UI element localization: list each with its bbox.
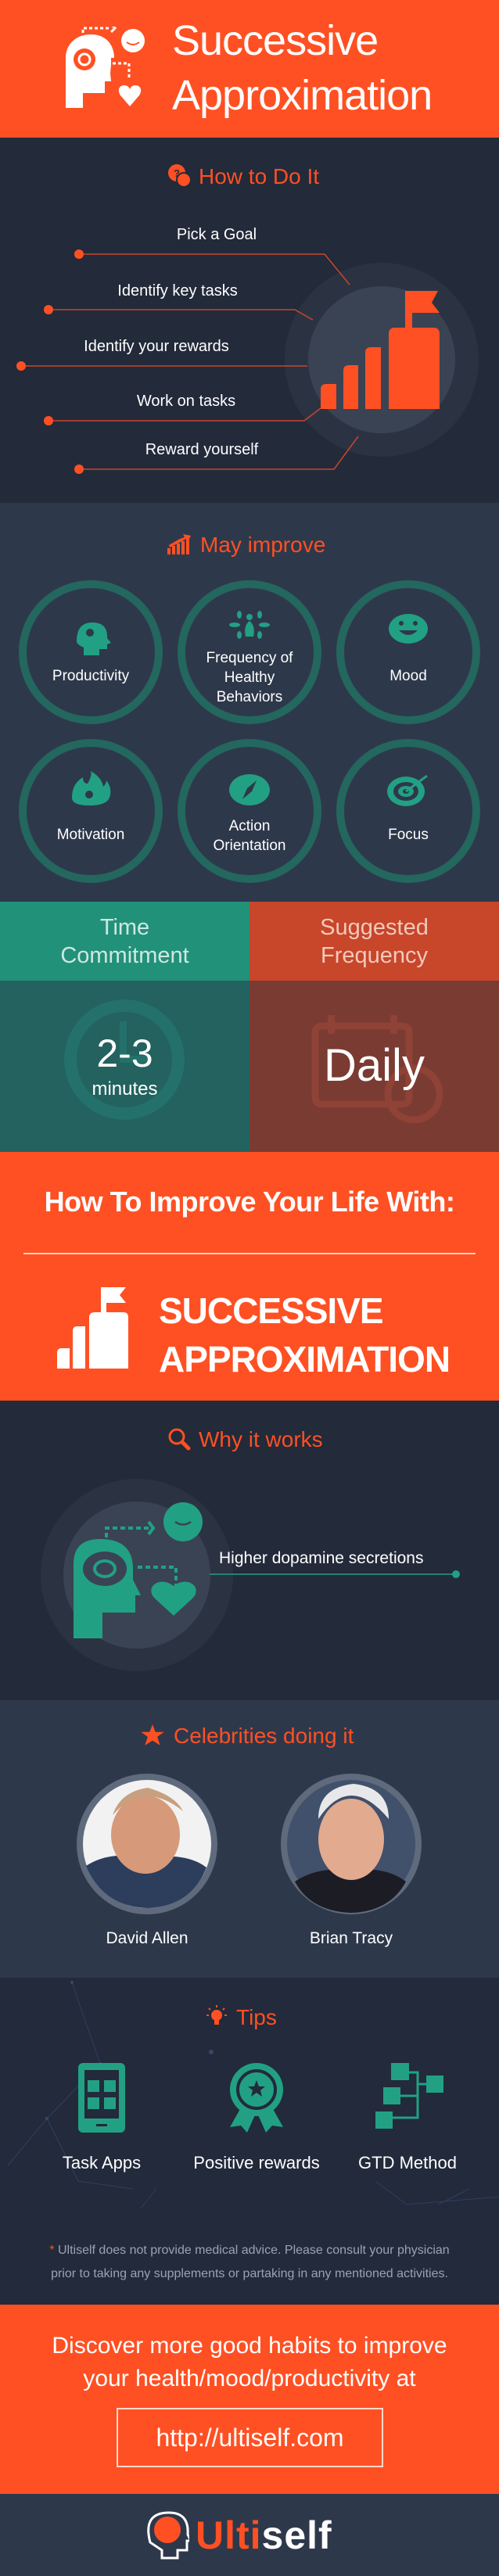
photo: brian tracy xyxy=(281,1774,422,1914)
title: Successive xyxy=(172,17,378,64)
cta text: your health/mood/productivity at xyxy=(83,2366,416,2391)
panel: improve banner xyxy=(0,1152,499,1401)
panel: celebrities xyxy=(0,1700,499,1978)
steps diagram: Pick a Goal xyxy=(177,226,257,243)
benefit circles: Orientation xyxy=(214,838,285,854)
tip: positive rewards: Positive rewards xyxy=(193,2153,320,2172)
benefit circles xyxy=(19,580,480,883)
benefit circles: Healthy xyxy=(224,669,275,686)
heading: why it works: Why it works xyxy=(199,1427,323,1451)
label: time commitment: Time xyxy=(100,915,149,940)
label: time commitment xyxy=(60,915,189,968)
tip: task apps xyxy=(63,2063,141,2172)
tip: task apps: Task Apps xyxy=(63,2153,141,2172)
steps diagram: Identify key tasks xyxy=(117,282,238,300)
benefit circles: Focus xyxy=(388,827,429,843)
panel: why it works xyxy=(0,1401,499,1700)
steps diagram: Reward yourself xyxy=(145,441,259,458)
heading: tips: Tips xyxy=(236,2005,277,2029)
value: daily: Daily xyxy=(324,1040,425,1091)
benefit circles: Mood xyxy=(390,668,427,684)
benefit circles: Motivation xyxy=(57,827,124,843)
tip: gtd method xyxy=(358,2063,457,2172)
banner title: APPROXIMATION xyxy=(159,1339,450,1379)
panel: tips xyxy=(0,1978,499,2305)
cta text: Discover more good habits to improve xyxy=(52,2333,447,2359)
label: time commitment: Commitment xyxy=(60,943,189,968)
icon: brain dopamine diagram xyxy=(41,1479,460,1671)
banner title: SUCCESSIVE xyxy=(159,1290,383,1331)
icon: bars with flag xyxy=(57,1287,128,1369)
header xyxy=(0,0,499,138)
cta text xyxy=(52,2333,447,2391)
heading: how to do it: How to Do It xyxy=(199,164,319,188)
steps diagram: Work on tasks xyxy=(137,393,235,410)
panel: may improve xyxy=(0,503,499,902)
disclaimer xyxy=(49,2244,450,2280)
logo: ultiself xyxy=(147,2512,332,2559)
url button: http://ultiself.com xyxy=(156,2424,344,2452)
panel: daily value xyxy=(250,981,499,1152)
label: suggested frequency: Suggested xyxy=(320,915,429,940)
panel: minutes value xyxy=(0,981,250,1152)
icon: head with happy faces xyxy=(66,27,145,108)
banner title xyxy=(159,1290,450,1379)
label: suggested frequency: Frequency xyxy=(321,943,428,968)
value: 2-3 minutes: 2-3 xyxy=(96,1031,153,1075)
steps diagram: Identify your rewards xyxy=(84,338,229,355)
footer xyxy=(0,2494,499,2576)
benefit circles: Behaviors xyxy=(217,689,282,705)
heading: tips xyxy=(206,2005,277,2029)
banner heading: How To Improve Your Life With: xyxy=(45,1186,454,1218)
disclaimer: prior to taking any supplements or partaking in any mentioned activities. xyxy=(51,2267,448,2280)
benefit circles: Productivity xyxy=(52,668,130,684)
benefit circles: Frequency of xyxy=(206,650,293,666)
panel: time commitment xyxy=(0,902,250,981)
panel: call to action xyxy=(0,2305,499,2494)
panel: suggested frequency xyxy=(250,902,499,981)
photo: david allen xyxy=(77,1774,217,1914)
panel: celebrities: Brian Tracy xyxy=(310,1929,393,1947)
panel: minutes value: minutes xyxy=(92,1078,158,1100)
tip: positive rewards xyxy=(193,2063,320,2172)
benefit circles: Action xyxy=(229,818,270,834)
panel: how to do it xyxy=(0,138,499,503)
heading: celebrities doing it: Celebrities doing it xyxy=(174,1724,354,1748)
url button xyxy=(117,2408,383,2467)
disclaimer: * Ultiself does not provide medical advice. Please consult your physician xyxy=(49,2244,450,2257)
tip: gtd method: GTD Method xyxy=(358,2153,457,2172)
heading: may improve: May improve xyxy=(200,533,325,557)
heading: how to do it: ? xyxy=(174,167,180,179)
title xyxy=(172,17,432,119)
names: David Allen xyxy=(106,1929,188,1947)
title: Approximation xyxy=(172,72,432,119)
steps diagram xyxy=(16,226,479,474)
logo: ultiself: Ultiself xyxy=(196,2513,332,2557)
label: suggested frequency xyxy=(320,915,429,968)
icon: brain dopamine diagram: Higher dopamine secretions xyxy=(219,1549,423,1567)
